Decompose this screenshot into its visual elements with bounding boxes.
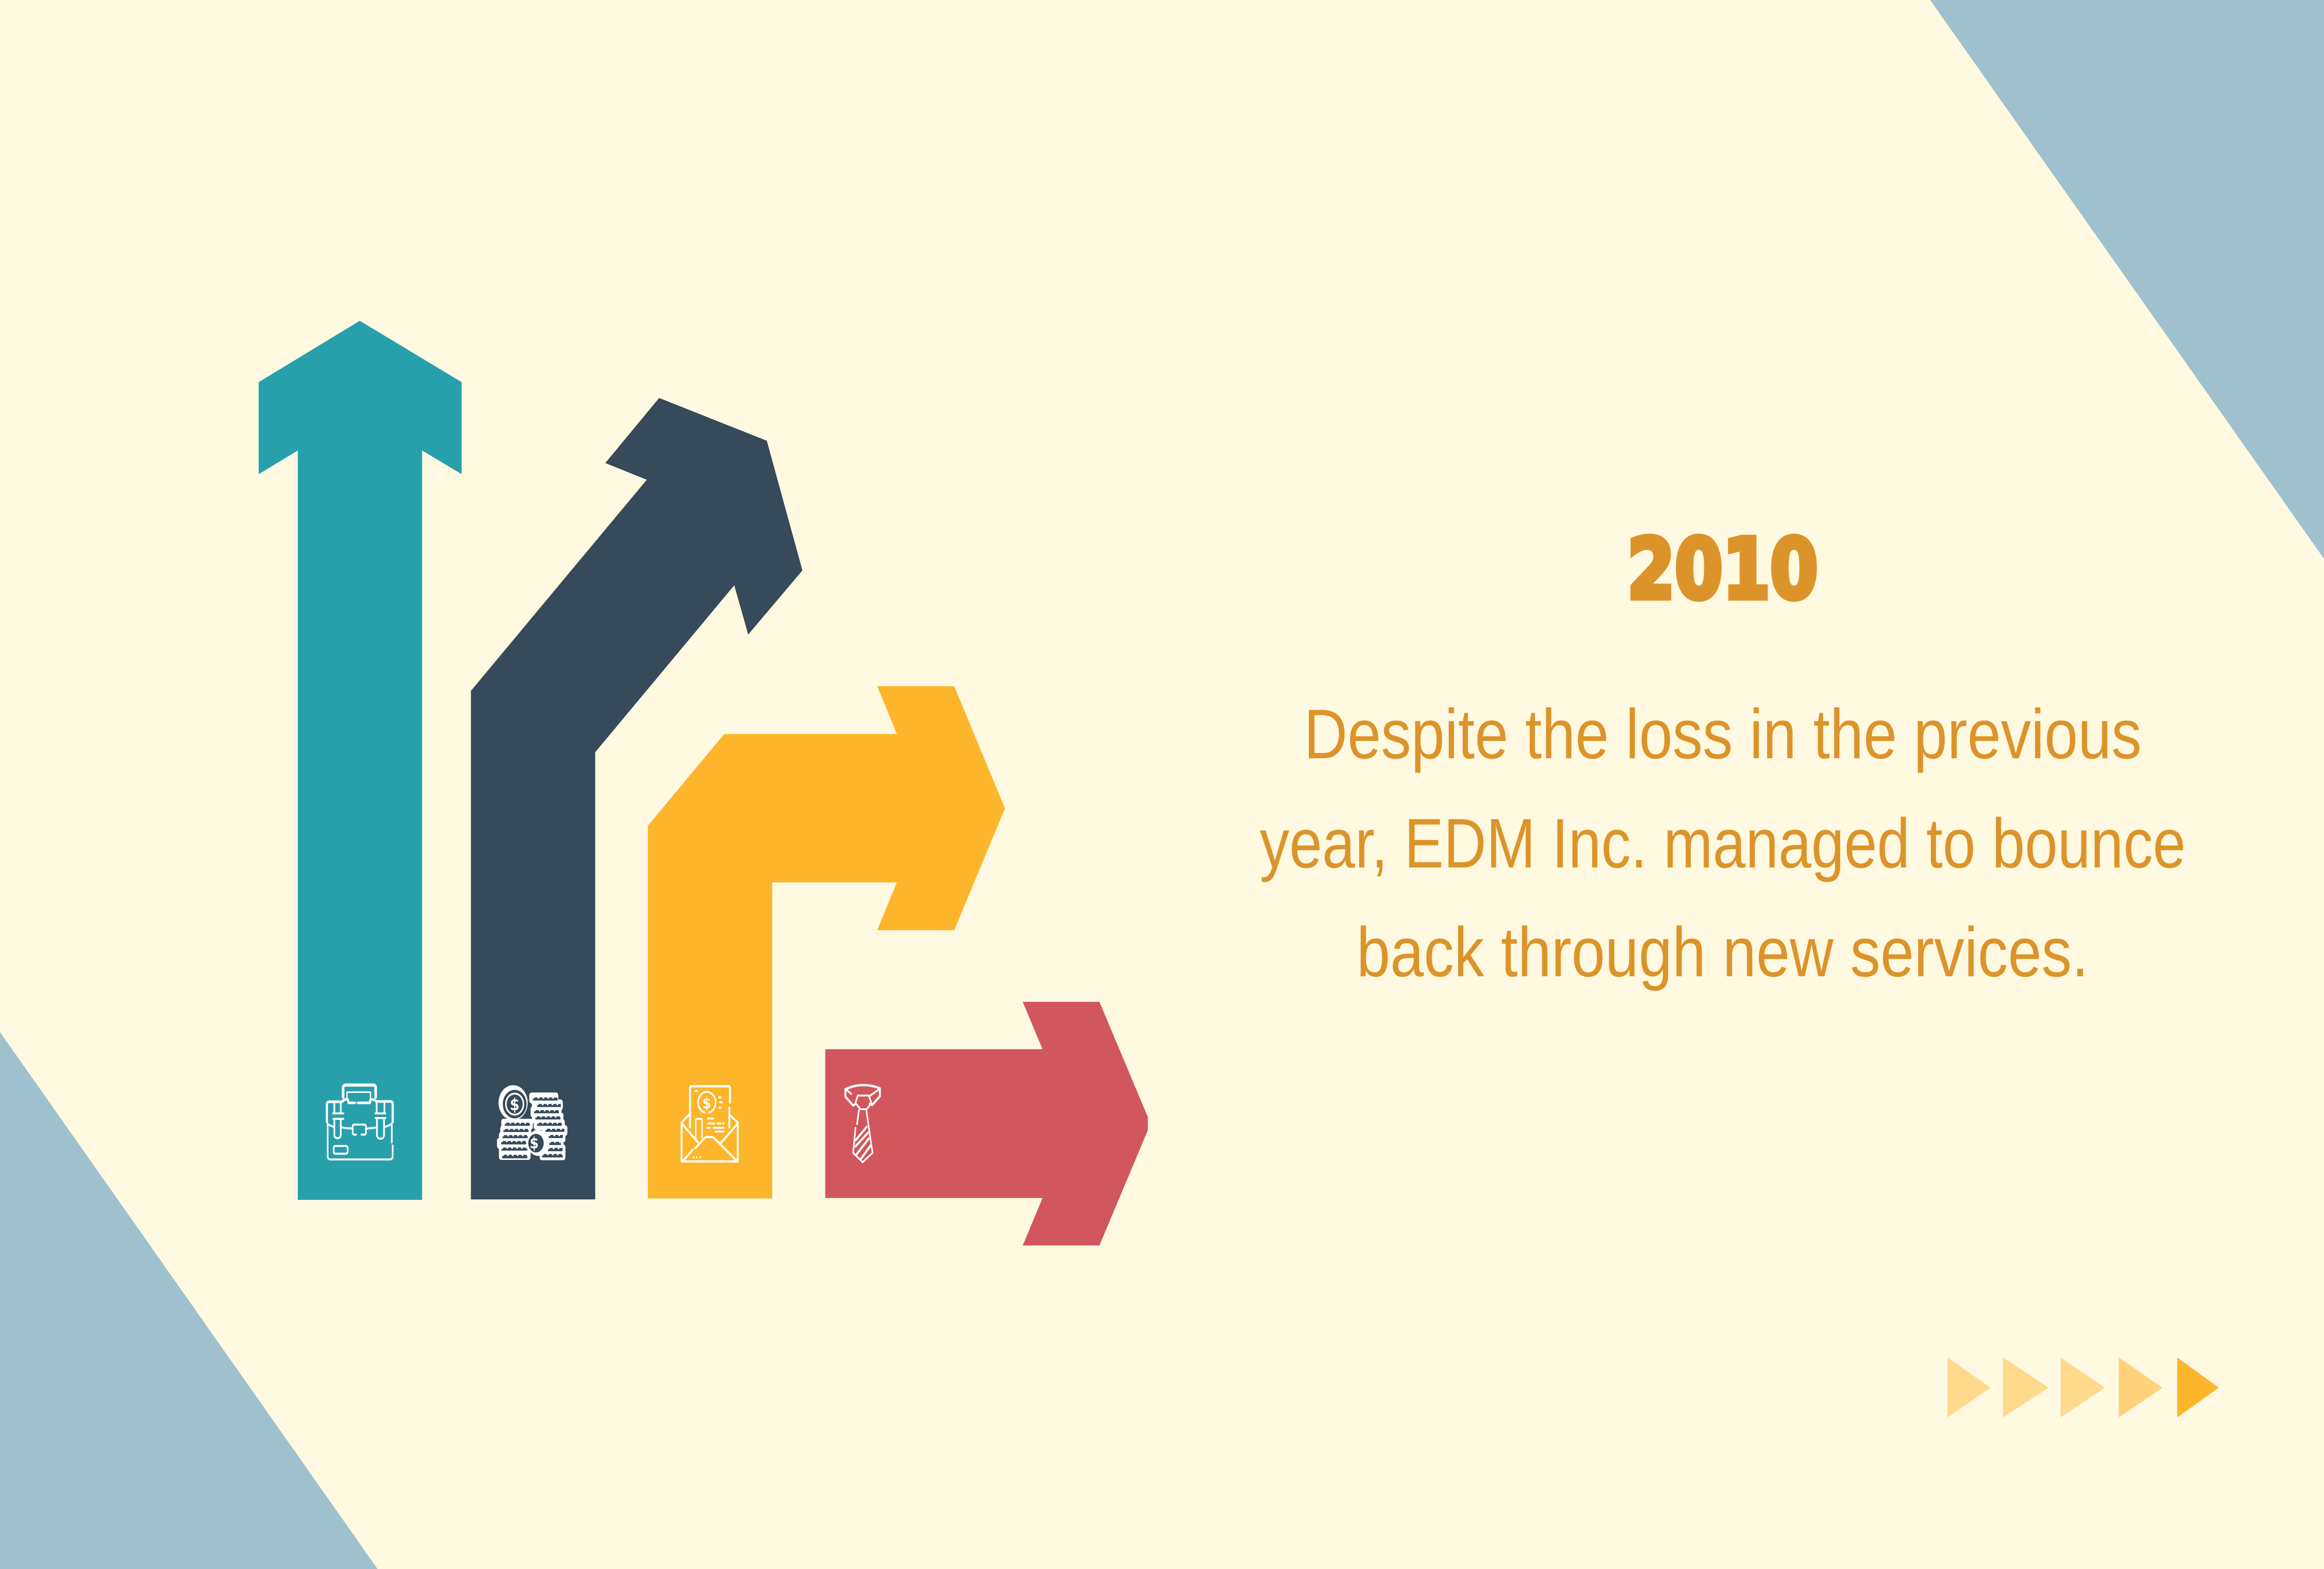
icon: coins xyxy=(497,1085,568,1160)
icon: coins: $ xyxy=(530,1135,539,1152)
icon: envelope with invoice: $ xyxy=(702,1095,711,1112)
corner triangle: bottom left xyxy=(0,1032,377,1569)
icon: necktie xyxy=(845,1085,880,1162)
icon: envelope with invoice xyxy=(681,1086,738,1161)
progress indicator: five triangles xyxy=(1948,1357,2218,1417)
text block: description: back through new services. xyxy=(1357,913,2088,992)
corner triangle: top right xyxy=(1930,0,2324,559)
arrow: dark slate, bent up-right xyxy=(471,398,802,1199)
text block: description: year, EDM Inc. managed to bounce xyxy=(1260,804,2186,883)
text block: description xyxy=(1260,695,2186,992)
arrow: teal, pointing up xyxy=(259,321,462,1200)
icon: briefcase xyxy=(327,1085,393,1159)
text block: description: Despite the loss in the previous xyxy=(1304,695,2142,774)
icon: coins: $ xyxy=(510,1094,520,1114)
arrow: red, pointing right xyxy=(825,1002,1148,1245)
heading: year: 2010 xyxy=(1627,521,1818,617)
arrow: yellow, bent right xyxy=(648,686,1005,1198)
